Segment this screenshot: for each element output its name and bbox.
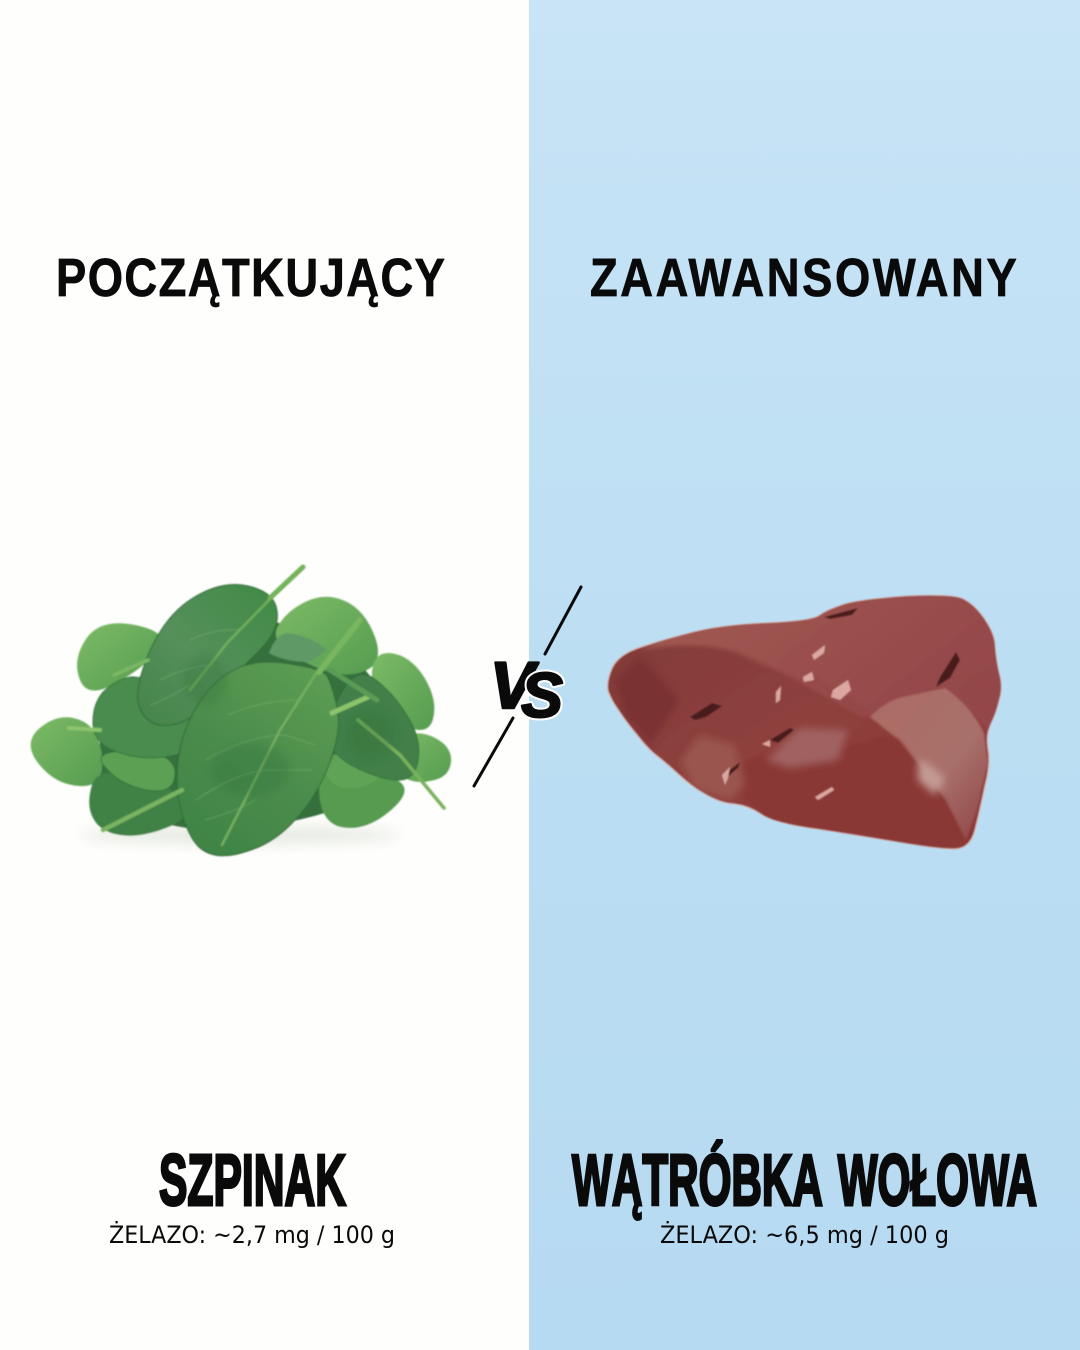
label: spinach iron content: ŻELAZO: ~2,7 mg / 100 g — [109, 1220, 395, 1249]
label: spinach name: SZPINAK — [159, 1141, 346, 1221]
illustration: beef liver — [608, 590, 1010, 850]
dark vessels and pale fat flecks belong to the liver — [690, 608, 960, 780]
icon: versus label: V — [490, 648, 539, 722]
icon: versus divider line — [474, 587, 581, 786]
stems are part of the pile — [69, 567, 444, 845]
illustration: spinach pile — [31, 567, 451, 856]
icon: versus label: S — [521, 661, 563, 731]
label: liver iron content: ŻELAZO: ~6,5 mg / 100 g — [660, 1220, 949, 1249]
panel: right background — [529, 0, 1080, 1350]
heading: advanced: ZAAWANSOWANY — [590, 247, 1017, 308]
panel: left background — [0, 0, 529, 1350]
icon: versus label: S — [521, 661, 563, 731]
icon: versus label — [490, 648, 563, 731]
heading: beginner: POCZĄTKUJĄCY — [56, 247, 445, 308]
